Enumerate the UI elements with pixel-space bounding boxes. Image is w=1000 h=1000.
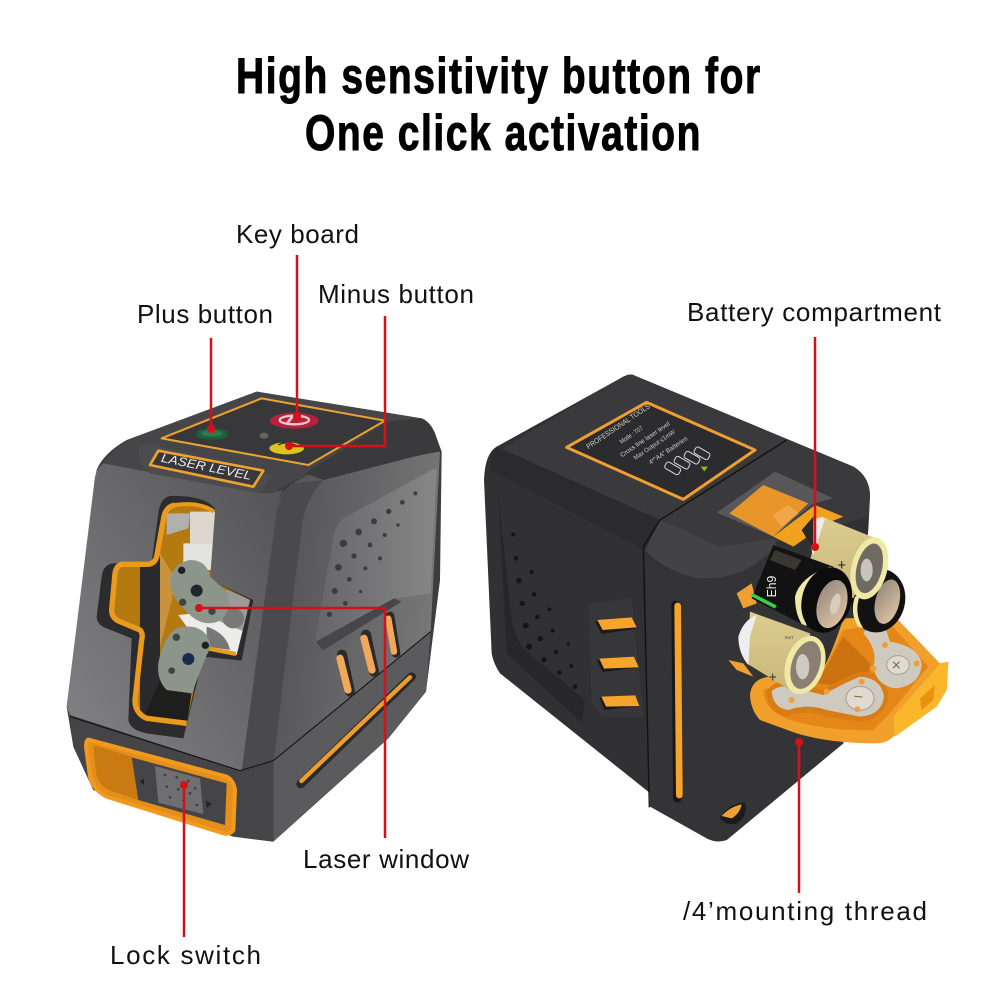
battery: black front (751, 545, 860, 639)
optical discs (170, 560, 229, 623)
corner chamfer (242, 480, 323, 771)
indicator (260, 433, 268, 439)
seam line (70, 632, 431, 771)
title (236, 47, 760, 161)
front face (67, 445, 283, 771)
metal contact ridge (767, 672, 888, 722)
base front (70, 717, 273, 842)
top face (500, 374, 870, 574)
battery: cream top: + (837, 558, 846, 574)
seam line (643, 440, 787, 807)
laser level plate: LASER LEVEL (160, 451, 253, 483)
spec label (567, 402, 755, 499)
battery door (750, 617, 948, 743)
callout: mounting thread: /4’mounting thread (683, 896, 927, 926)
battery compartment recess (717, 472, 843, 677)
callout: laser window: Laser window (303, 844, 469, 874)
vertical slot (676, 605, 679, 798)
slot panel (588, 598, 643, 717)
battery icons (664, 446, 711, 476)
left recessed panel (498, 497, 585, 723)
spec label: Cross line laser level (619, 421, 671, 459)
button: plus (195, 428, 229, 440)
callout: lock switch: Lock switch (110, 940, 261, 970)
callout: key board: Key board (236, 219, 359, 249)
side speaker dots (327, 491, 417, 617)
orange slots (595, 617, 639, 710)
side slot (301, 677, 412, 784)
callout: mounting thread (683, 738, 927, 926)
callout: plus button (137, 299, 273, 433)
body silhouette (67, 392, 442, 842)
callout: minus button: Minus button (318, 279, 474, 309)
device: laser level battery view (484, 374, 948, 841)
spec label: PROFESSIONAL TOOLS (584, 402, 652, 451)
callout: minus button (285, 279, 474, 450)
callout: lock switch (110, 781, 261, 970)
callout: laser window (195, 604, 469, 874)
top panel with buttons (162, 398, 385, 465)
title: One click activation (305, 104, 700, 161)
battery: cream top (802, 517, 894, 603)
mounting hole (720, 803, 746, 824)
callout: plus button: Plus button (137, 299, 273, 329)
laser level plate (139, 444, 273, 493)
callout: battery compartment: Battery compartment (687, 297, 942, 327)
battery: black front: Eh9 (764, 576, 779, 597)
button: power (270, 413, 319, 429)
laser window (97, 496, 257, 738)
orange side slots (340, 616, 396, 692)
callout: key board (236, 219, 359, 420)
device: laser level front view (67, 392, 442, 842)
title: High sensitivity button for (236, 47, 760, 104)
side face (242, 452, 440, 771)
spec label: 4*"AA" Batteries (648, 435, 689, 466)
battery door: × (891, 656, 901, 675)
battery door: − (853, 687, 864, 707)
spec label: Mode : T07 (619, 425, 645, 446)
battery: cream bottom: LR6 (784, 635, 793, 640)
left chamfer (490, 447, 660, 550)
speaker dots (511, 532, 577, 689)
right face (645, 543, 843, 841)
lock switch recess (86, 740, 235, 834)
battery: cream bottom (738, 612, 833, 700)
side recessed panel (315, 467, 437, 650)
lock switch (132, 757, 227, 825)
callout: battery compartment (687, 297, 942, 551)
battery: cream bottom: + (769, 669, 777, 685)
body silhouette (484, 374, 870, 841)
top face (103, 392, 440, 493)
metal contacts (772, 677, 884, 717)
battery: black right (845, 563, 912, 638)
button: minus (269, 442, 304, 454)
spec label: Max Output ≤1mW (633, 429, 677, 462)
chamfer corner (645, 520, 777, 578)
base side (273, 632, 431, 842)
batteries (738, 517, 912, 700)
